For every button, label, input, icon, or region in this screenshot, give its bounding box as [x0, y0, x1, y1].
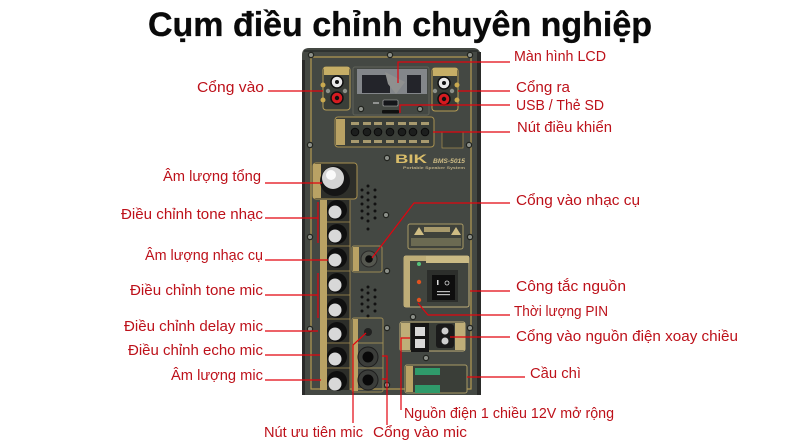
fuse panel — [405, 365, 467, 393]
brand logo: BMS-5015 — [433, 159, 466, 165]
callout lines — [265, 62, 525, 425]
label: Nút ưu tiên mic: Nút ưu tiên mic — [264, 425, 363, 441]
brand logo: Portable Speaker System — [403, 165, 466, 170]
label: Âm lượng nhạc cụ: Âm lượng nhạc cụ — [145, 247, 263, 264]
label: Âm lượng tổng: Âm lượng tổng — [163, 168, 261, 185]
priority switch and mic jacks — [352, 318, 383, 392]
label: Điều chỉnh delay mic: Điều chỉnh delay mic — [124, 319, 263, 335]
label: Cầu chì: Cầu chì — [530, 366, 581, 382]
brand logo: BIK — [395, 152, 428, 166]
USB and SD slots — [373, 100, 399, 114]
instrument input jack — [352, 246, 382, 272]
label: Cổng vào: Cổng vào — [197, 80, 264, 96]
panel: line input — [320, 67, 350, 110]
gold strip for small knobs — [320, 200, 327, 390]
label: Điều chỉnh echo mic: Điều chỉnh echo mic — [128, 343, 263, 359]
LCD screen — [353, 67, 429, 115]
caution label — [408, 224, 463, 249]
control buttons — [335, 117, 463, 148]
small knobs — [327, 200, 350, 391]
brand logo — [395, 152, 466, 170]
panel: audio output — [432, 68, 460, 111]
label: Công tắc nguồn: Công tắc nguồn — [516, 278, 626, 295]
label: Thời lượng PIN: Thời lượng PIN — [514, 304, 608, 320]
label: Điều chỉnh tone nhạc: Điều chỉnh tone nhạc — [121, 207, 263, 223]
label: Màn hình LCD: Màn hình LCD — [514, 49, 606, 65]
screws — [307, 52, 473, 388]
label: Cổng vào mic: Cổng vào mic — [373, 425, 467, 441]
label: Nút điều khiển: Nút điều khiển — [517, 120, 612, 136]
label: Âm lượng mic: Âm lượng mic — [171, 367, 263, 384]
label: Nguồn điện 1 chiều 12V mở rộng: Nguồn điện 1 chiều 12V mở rộng — [404, 406, 614, 422]
label: Điều chỉnh tone mic: Điều chỉnh tone mic — [130, 283, 263, 299]
title: Cụm điều chỉnh chuyên nghiệp — [148, 6, 652, 44]
label: Cổng vào nguồn điện xoay chiều: Cổng vào nguồn điện xoay chiều — [516, 329, 738, 345]
power panel — [404, 256, 469, 307]
speaker vent holes — [360, 184, 376, 318]
master volume knob — [313, 163, 357, 199]
panel: amplifier control board — [302, 48, 481, 395]
label: Cổng ra: Cổng ra — [516, 80, 571, 96]
label: USB / Thẻ SD: USB / Thẻ SD — [516, 98, 604, 114]
AC and DC power sockets — [400, 322, 465, 352]
label: Cổng vào nhạc cụ: Cổng vào nhạc cụ — [516, 193, 640, 209]
